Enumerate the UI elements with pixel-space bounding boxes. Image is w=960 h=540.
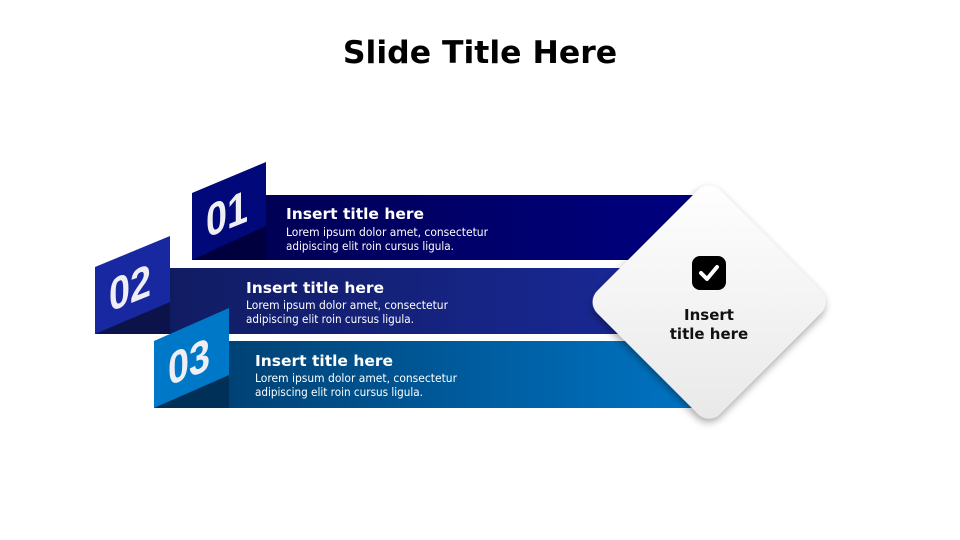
text 2: adipiscing elit roin cursus ligula. bbox=[246, 312, 414, 326]
text 1: Lorem ipsum dolor amet, consectetur bbox=[286, 225, 488, 239]
callout text: Insert bbox=[684, 306, 734, 324]
tile 01 bbox=[192, 162, 266, 260]
title: Slide Title Here bbox=[343, 35, 617, 71]
tile 02 bbox=[95, 236, 170, 334]
text 2: Lorem ipsum dolor amet, consectetur bbox=[246, 298, 448, 312]
text 3: adipiscing elit roin cursus ligula. bbox=[255, 385, 423, 399]
text 2: Insert title here bbox=[246, 279, 384, 297]
text 3: Lorem ipsum dolor amet, consectetur bbox=[255, 371, 457, 385]
text 3 bbox=[255, 352, 457, 399]
text 3: Insert title here bbox=[255, 352, 393, 370]
bar 3 bbox=[154, 308, 702, 408]
text 1: adipiscing elit roin cursus ligula. bbox=[286, 239, 454, 253]
bar 2 bbox=[95, 236, 702, 334]
text 2 bbox=[246, 279, 448, 326]
icon: check bbox=[692, 256, 726, 290]
text 1 bbox=[286, 205, 488, 253]
callout text bbox=[670, 306, 748, 343]
tile 02: 02 bbox=[109, 255, 151, 323]
bar 1 bbox=[192, 162, 702, 260]
tile 01: 01 bbox=[206, 181, 248, 249]
tile 03: 03 bbox=[168, 329, 210, 397]
tile 03 bbox=[154, 308, 229, 408]
text 1: Insert title here bbox=[286, 205, 424, 223]
diamond callout bbox=[586, 179, 832, 425]
callout text: title here bbox=[670, 325, 748, 343]
